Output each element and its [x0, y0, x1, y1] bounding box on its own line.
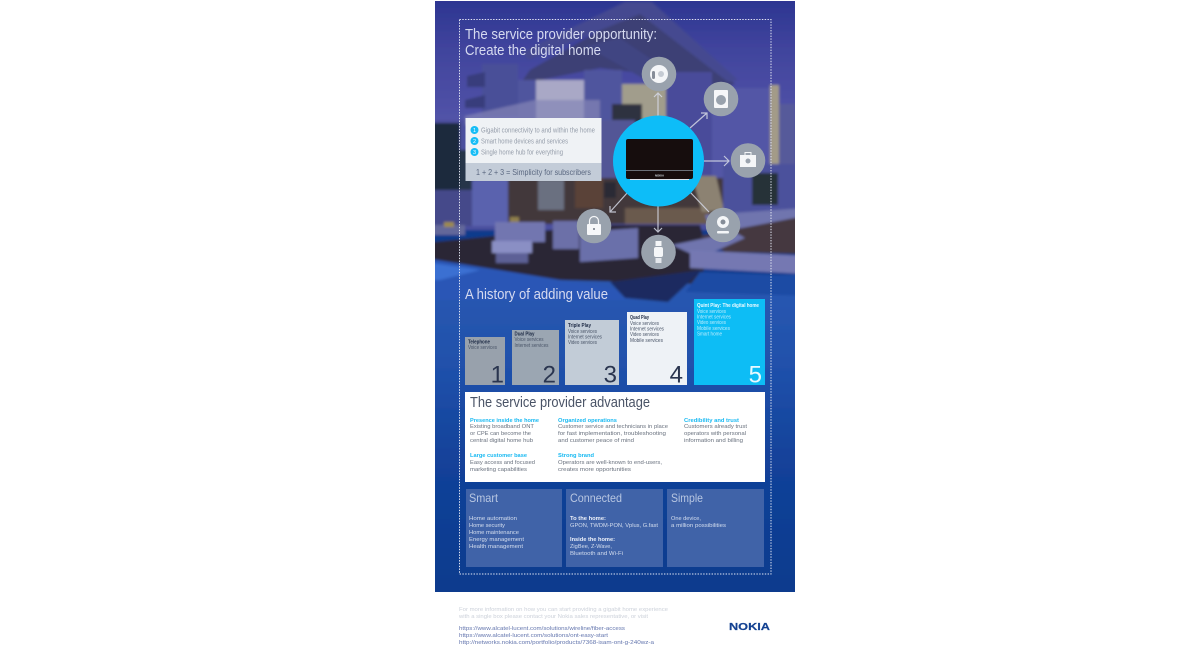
credibility and trust: Credibility and trust [684, 418, 739, 424]
organized operations: for fast implementation, troubleshooting [558, 431, 666, 437]
large customer base: Easy access and focused [470, 460, 535, 466]
arrows from hub to devices [610, 93, 729, 232]
card: quint play: Quint Play: The digital home [697, 303, 759, 309]
panel: three simple steps [466, 118, 602, 181]
panel: simple [667, 489, 764, 567]
card: telephone [465, 337, 505, 388]
panel: smart: Home maintenance [469, 530, 519, 536]
card: dual play: Voice services [514, 337, 544, 343]
dotted frame [460, 20, 771, 574]
hub circle with device [613, 116, 704, 206]
step 2: 2 [473, 139, 476, 145]
strong brand: Strong brand [558, 453, 594, 459]
step 2: Smart home devices and services [481, 138, 568, 146]
card: quint play: Smart home [697, 332, 722, 338]
step 2 [470, 137, 568, 146]
organized operations [558, 418, 668, 444]
step 3: 3 [473, 150, 476, 156]
title: The service provider opportunity: [465, 26, 657, 43]
card: telephone: Telephone [468, 340, 490, 346]
panel: connected: Connected [570, 491, 622, 505]
icon: smoke detector [642, 57, 676, 91]
panel: smart: Smart [469, 491, 499, 505]
card: quad play: 4 [670, 362, 683, 388]
panel: smart: Home automation [469, 516, 517, 522]
card: telephone: Voice services [468, 345, 497, 351]
organized operations: Customer service and technicians in place [558, 424, 668, 430]
footer contact text [458, 607, 668, 620]
panel: connected [566, 489, 663, 567]
card: quad play: Mobile services [630, 338, 663, 344]
credibility and trust: operators with personal [684, 431, 746, 437]
large customer base: Large customer base [470, 453, 527, 459]
icon: webcam [706, 208, 740, 242]
large customer base [470, 453, 535, 473]
step 1 [470, 126, 595, 134]
panel: connected: GPON, TWDM-PON, Vplus, G.fast [570, 523, 658, 529]
card: triple play: 3 [604, 362, 617, 388]
step 3: Single home hub for everything [481, 150, 563, 156]
card: quad play: Quad Play [630, 315, 649, 321]
card: dual play: Internet services [514, 343, 549, 349]
panel: smart: Home security [469, 523, 505, 529]
panel: smart [466, 489, 562, 567]
card: quint play: Internet services [697, 314, 731, 320]
card: triple play: Video services [568, 340, 597, 346]
panel: simple: a million possibilities [671, 523, 726, 529]
panel: simple: One device, [671, 516, 701, 522]
footer contact text: For more information on how you can start providing a gigabit home experience [459, 607, 668, 613]
card: triple play: Voice services [568, 329, 597, 335]
icon: padlock [577, 209, 611, 243]
presence inside the home: central digital home hub [470, 438, 533, 444]
card: quint play: Voice services [697, 309, 726, 315]
card: quint play [694, 299, 765, 388]
icon: light bulb [641, 235, 676, 269]
card: quad play: Internet services [630, 326, 664, 332]
card: dual play: 2 [543, 362, 556, 388]
icon: first aid case [731, 143, 765, 178]
card: quint play: Mobile services [697, 326, 730, 332]
organized operations: and customer peace of mind [558, 438, 634, 444]
title [465, 26, 657, 59]
presence inside the home [470, 418, 539, 444]
card: telephone: 1 [491, 362, 504, 388]
background photo: modern house at dusk [425, 0, 805, 605]
strong brand: Operators are well-known to end-users, [558, 460, 663, 466]
card: triple play: Triple Play [568, 323, 591, 329]
strong brand [558, 453, 663, 473]
card: quad play: Voice services [630, 321, 659, 327]
card: dual play: Dual Play [514, 332, 535, 338]
card: quint play: 5 [749, 362, 762, 388]
credibility and trust: information and billing [684, 438, 743, 444]
credibility and trust [684, 418, 747, 444]
card: triple play: Internet services [568, 334, 602, 340]
step 1: 1 [473, 128, 476, 134]
title: Create the digital home [465, 42, 601, 59]
credibility and trust: Customers already trust [684, 424, 747, 430]
panel: smart: Health management [469, 544, 524, 550]
card: dual play [512, 330, 559, 388]
icon: washing machine [704, 82, 738, 116]
organized operations: Organized operations [558, 418, 617, 424]
formula: 1 + 2 + 3 = Simplicity for subscribers [476, 167, 591, 177]
panel: smart: Energy management [469, 537, 525, 543]
strong brand: creates more opportunities [558, 467, 631, 473]
logo: Nokia: NOKIA [729, 622, 770, 633]
presence inside the home: Presence inside the home [470, 418, 539, 424]
footer links: http://networks.nokia.com/portfolio/products/7368-isam-ont-g-240wz-a [459, 640, 655, 646]
card: triple play [565, 320, 619, 388]
heading: history: A history of adding value [465, 286, 608, 303]
step 1: Gigabit connectivity to and within the home [481, 128, 595, 134]
panel: the service provider advantage [465, 392, 765, 482]
presence inside the home: or CPE can become the [470, 431, 531, 437]
footer links [459, 626, 655, 646]
step 3 [470, 148, 563, 156]
card: quint play: Video services [697, 320, 726, 326]
panel: simple: Simple [671, 491, 703, 505]
panel: connected: Inside the home: [570, 537, 615, 543]
heading: The service provider advantage [470, 395, 650, 411]
presence inside the home: Existing broadband ONT [470, 424, 535, 430]
card: quad play: Video services [630, 332, 659, 338]
footer contact text: with a single box please contact your Nokia sales representative, or visit [458, 614, 649, 620]
icon: home hub device: NOKIA [655, 174, 664, 178]
large customer base: marketing capabilities [470, 467, 527, 473]
footer links: https://www.alcatel-lucent.com/solutions/wireline/fiber-access [459, 626, 625, 632]
panel: connected: To the home: [570, 516, 606, 522]
panel: connected: Bluetooth and Wi-Fi [570, 551, 623, 557]
panel: connected: ZigBee, Z-Wave, [570, 544, 612, 550]
footer links: https://www.alcatel-lucent.com/solutions/ont-easy-start [459, 633, 609, 639]
card: quad play [627, 312, 687, 388]
